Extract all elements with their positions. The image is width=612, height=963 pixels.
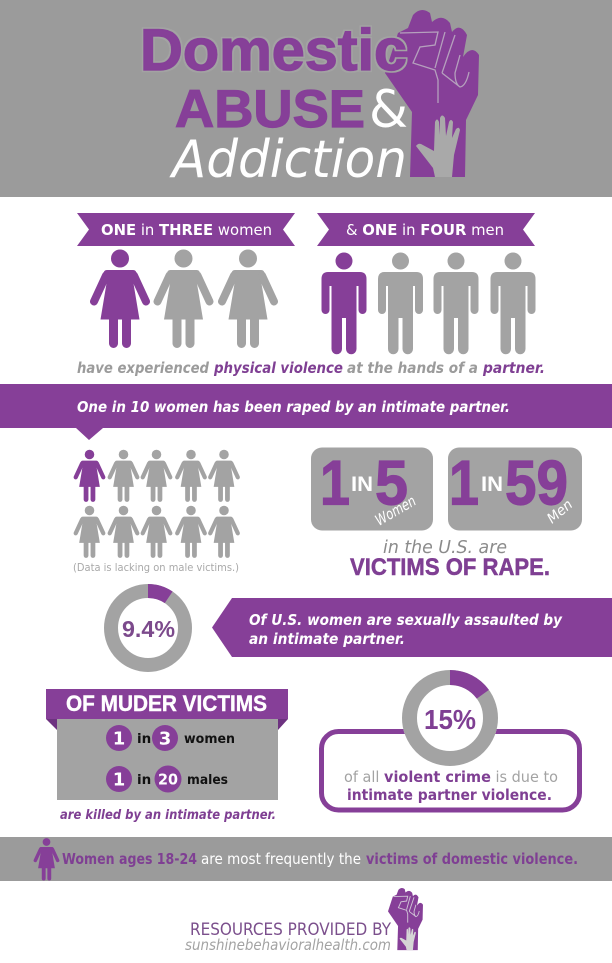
physical violence caption: at the hands of a [347,359,478,377]
small figures: one in ten [76,450,238,558]
header background [0,0,612,197]
stat box: 1 in 59 men: 1 [449,448,479,518]
resources credit: RESOURCES PROVIDED BY [190,920,392,940]
ribbon: one in three women [77,213,295,246]
row: 1 in 3 women: women [184,731,235,747]
arrow band: sexually assaulted [212,598,612,657]
row: 1 in 3 women [106,725,235,751]
stat box: 1 in 5 women: Women [372,492,419,529]
physical violence caption: physical violence [213,359,343,377]
ribbon: one in three women: ONE in THREE women [101,221,272,239]
resources credit [185,920,392,954]
data note: (Data is lacking on male victims.) [73,562,239,574]
panel: murder victims: OF MUDER VICTIMS [66,691,267,716]
row: 1 in 3 women: in [137,731,151,747]
band: women ages 18-24 [0,837,612,881]
band: women ages 18-24: are most frequently the [201,850,361,868]
row: 1 in 20 males [106,766,228,792]
panel: murder victims [46,689,288,800]
physical violence caption: have experienced [77,359,210,377]
panel: 15% violent crime [322,670,580,810]
stat box: 1 in 59 men: IN [481,473,503,496]
row: 1 in 20 males: in [137,772,151,788]
row: 1 in 3 women: 1 [113,728,125,750]
title: Addiction [169,130,407,190]
row: 1 in 20 males: 20 [158,770,178,788]
row: 1 in 20 males: males [187,772,228,788]
title: Domestic [140,18,407,83]
title [140,18,408,190]
band: women ages 18-24: victims of domestic violence. [366,850,578,868]
title: & [369,80,408,140]
icon: logo fist [388,888,423,950]
panel: 15% violent crime: intimate partner violence. [347,786,552,804]
title: ABUSE [175,80,365,139]
row: 1 in 3 women: 3 [159,728,171,750]
stat box: 1 in 5 women: IN [351,473,373,496]
stat box: 1 in 5 women: 5 [375,448,408,518]
men figures [322,252,536,354]
donut: 15% [402,670,498,766]
women figures [94,250,274,348]
band: women ages 18-24: Women ages 18-24 [62,850,197,868]
donut: 9.4% [111,591,185,665]
stat box: 1 in 5 women [311,448,433,530]
arrow band: sexually assaulted: an intimate partner. [249,630,405,648]
icon: raised fist with child hand [385,10,479,177]
arrow band: sexually assaulted: Of U.S. women are sexually assaulted by [249,611,563,629]
donut: 15%: 15% [424,704,476,735]
stat box: 1 in 59 men: Men [544,497,576,527]
victims of rape caption: in the U.S. are [383,537,507,558]
resources credit: sunshinebehavioralhealth.com [185,936,391,954]
stat box: 1 in 5 women: 1 [320,448,350,518]
donut: 9.4%: 9.4% [122,616,175,642]
stat box: 1 in 59 men [448,448,582,530]
band: one in 10 women: One in 10 women has been raped by an intimate partner. [77,398,510,416]
panel: 15% violent crime: of all violent crime is due to [344,768,558,786]
victims of rape caption [350,537,550,581]
row: 1 in 20 males: 1 [113,770,125,790]
ribbon: one in four men [317,213,535,246]
stat box: 1 in 59 men: 59 [505,448,568,518]
icon: child hand [416,116,460,177]
physical violence caption [77,359,545,377]
physical violence caption: partner. [482,359,545,377]
ribbon: one in four men: & ONE in FOUR men [346,221,504,239]
band: one in 10 women [0,384,612,440]
killed by partner caption: are killed by an intimate partner. [60,808,276,823]
victims of rape caption: VICTIMS OF RAPE. [350,554,550,581]
icon: woman [35,838,58,880]
